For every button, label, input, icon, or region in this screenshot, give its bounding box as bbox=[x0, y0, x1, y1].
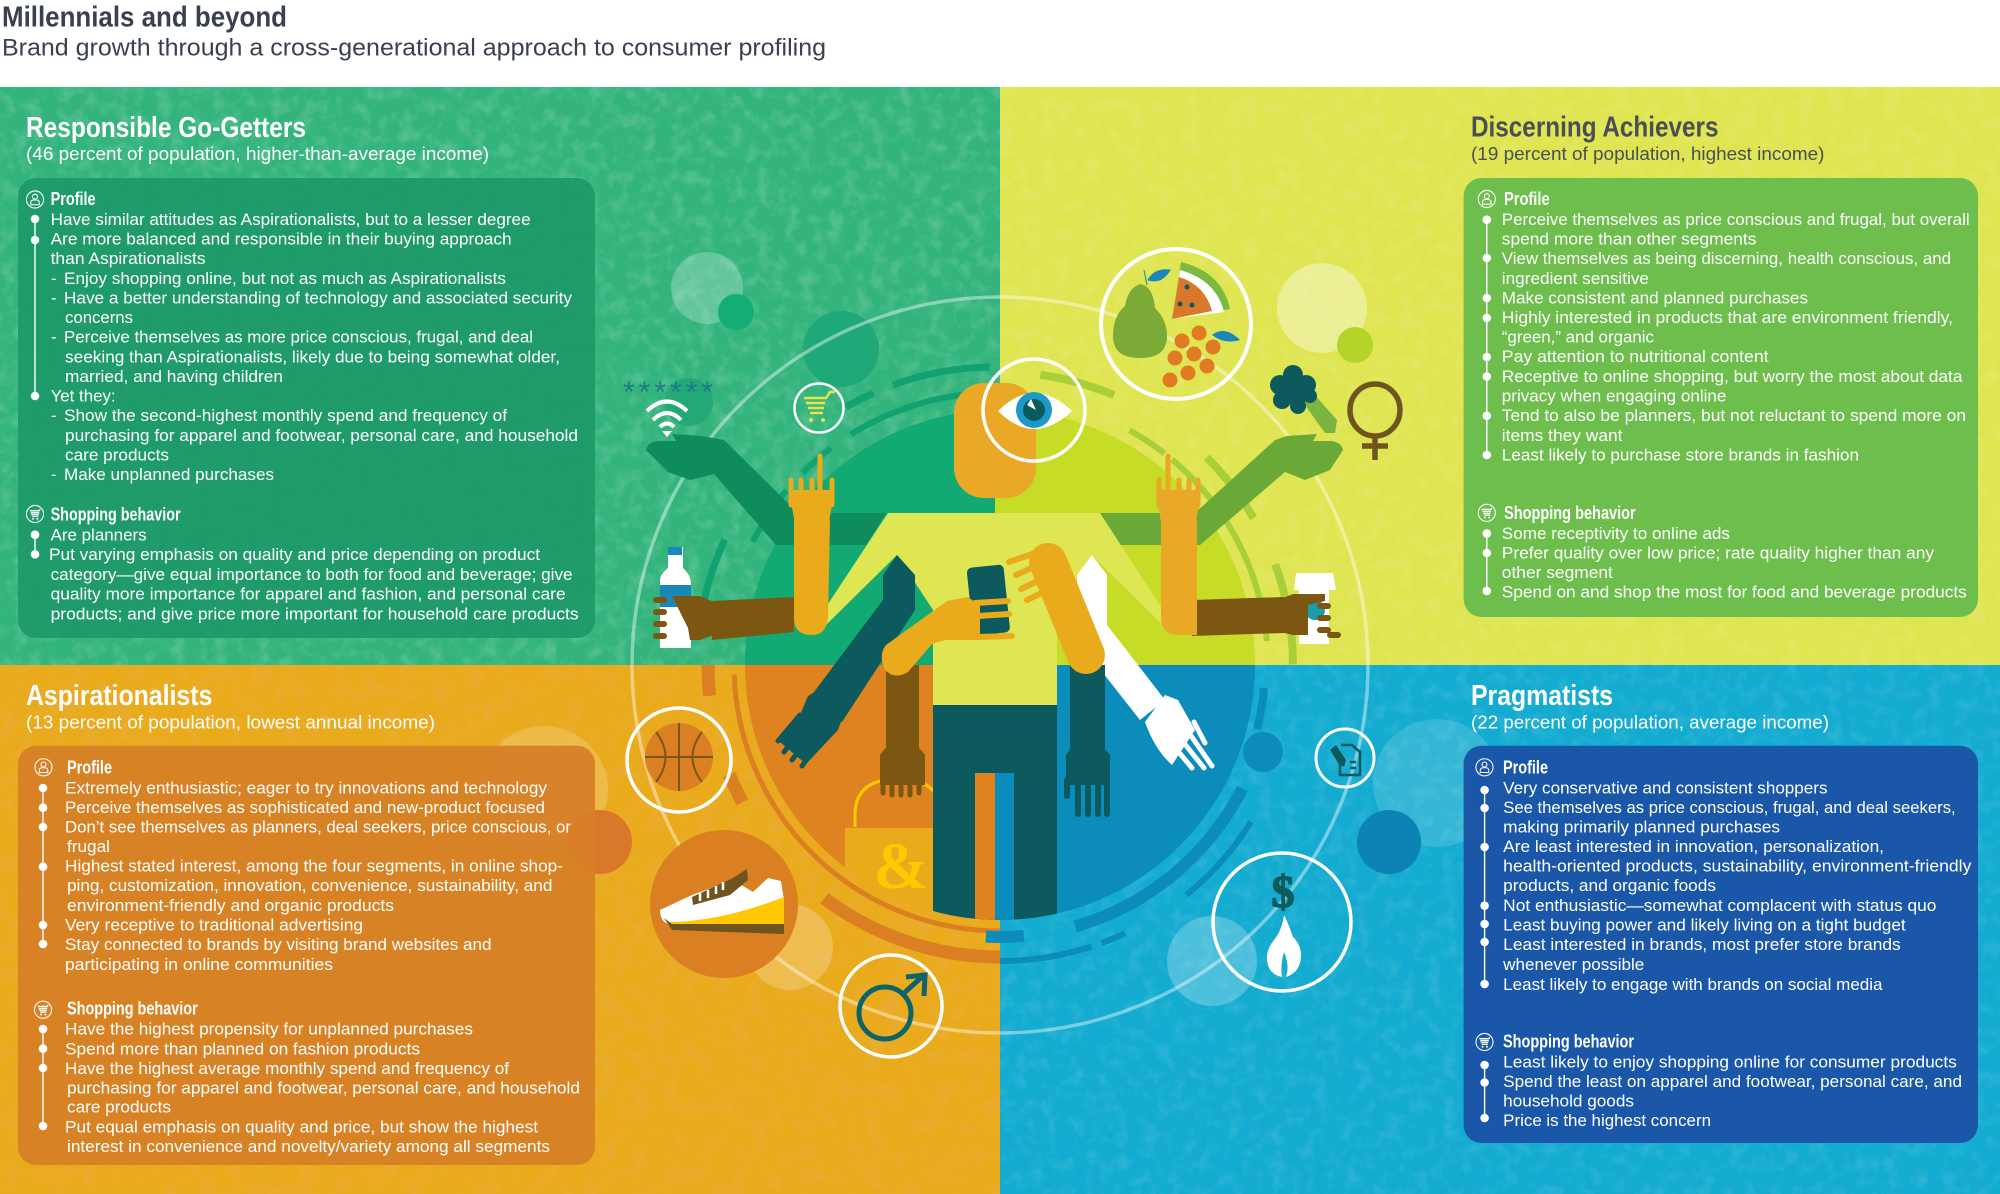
profile section bbox=[26, 188, 578, 484]
profile section: whenever possible bbox=[1502, 955, 1644, 974]
profile section: See themselves as price conscious, frugal, and deal seekers, bbox=[1503, 798, 1956, 817]
icon: dollar and flame bbox=[1213, 853, 1351, 991]
profile section: - bbox=[51, 288, 57, 308]
phone bbox=[966, 564, 1010, 636]
heading: Aspirationalists bbox=[26, 680, 212, 712]
illustration: central figure with icons bbox=[480, 249, 1501, 1057]
profile section: health-oriented products, sustainability, environment-friendly bbox=[1503, 857, 1972, 876]
shopping behavior section: interest in convenience and novelty/variety among all segments bbox=[67, 1137, 550, 1156]
profile section: Perceive themselves as price conscious and frugal, but overall bbox=[1502, 210, 1970, 229]
shopping behavior section: Some receptivity to online ads bbox=[1502, 524, 1730, 543]
icon: wifi and password bbox=[623, 376, 713, 437]
shopping behavior section: Prefer quality over low price; rate quality higher than any bbox=[1502, 543, 1935, 562]
heading: Responsible Go-Getters bbox=[26, 112, 306, 144]
profile section: Extremely enthusiastic; eager to try innovations and technology bbox=[65, 778, 548, 797]
profile section: Least interested in brands, most prefer store brands bbox=[1503, 935, 1901, 954]
icon: sneaker bbox=[650, 830, 798, 978]
shopping behavior section: Shopping behavior bbox=[1504, 502, 1636, 523]
shopping behavior section: Spend the least on apparel and footwear, personal care, and bbox=[1503, 1072, 1962, 1091]
decorative circles bbox=[480, 252, 1501, 1006]
profile section: Profile bbox=[67, 756, 112, 777]
shopping behavior section bbox=[34, 998, 580, 1156]
profile section: Not enthusiastic—somewhat complacent with status quo bbox=[1503, 896, 1936, 915]
profile section: View themselves as being discerning, health conscious, and bbox=[1502, 249, 1951, 268]
icon: wifi and password: ****** bbox=[623, 376, 713, 409]
profile section: Have a better understanding of technology and associated security bbox=[64, 288, 573, 308]
icon: fruit bbox=[1101, 249, 1251, 399]
shopping behavior section: Have the highest average monthly spend and frequency of bbox=[65, 1059, 509, 1078]
profile section: - bbox=[51, 465, 57, 484]
icon: male symbol bbox=[840, 955, 942, 1057]
profile section bbox=[1476, 756, 1972, 994]
inner disc bbox=[745, 410, 1255, 920]
profile section: Make consistent and planned purchases bbox=[1502, 288, 1808, 308]
teal lower arm with hand bbox=[1066, 665, 1110, 814]
heading bbox=[1471, 680, 1829, 733]
profile section: products, and organic foods bbox=[1503, 876, 1716, 895]
profile section: Profile bbox=[51, 188, 96, 209]
profile section: married, and having children bbox=[65, 367, 283, 386]
profile section: Tend to also be planners, but not reluctant to spend more on bbox=[1502, 406, 1966, 425]
profile section: environment-friendly and organic products bbox=[67, 896, 394, 915]
shopping behavior section: purchasing for apparel and footwear, personal care, and household bbox=[67, 1079, 580, 1098]
heading: (22 percent of population, average income) bbox=[1471, 712, 1829, 733]
icon: broccoli bbox=[1270, 365, 1337, 433]
heading: Pragmatists bbox=[1471, 680, 1613, 712]
profile section: Are least interested in innovation, personalization, bbox=[1503, 837, 1884, 856]
orange arm pointing at phone bbox=[1009, 552, 1086, 655]
heading bbox=[26, 112, 489, 164]
orange arm holding phone bbox=[882, 597, 1012, 676]
text box bbox=[18, 178, 595, 638]
shopping bag: & bbox=[874, 830, 928, 903]
profile section: Don’t see themselves as planners, deal seekers, price conscious, or bbox=[65, 818, 571, 837]
profile section: “green,” and organic bbox=[1502, 328, 1654, 346]
profile section: - bbox=[51, 406, 57, 425]
shopping behavior section: Shopping behavior bbox=[51, 504, 181, 525]
green arms bbox=[646, 434, 1343, 545]
shopping behavior section: care products bbox=[67, 1098, 171, 1116]
shopping bag bbox=[845, 780, 933, 911]
shopping behavior section bbox=[1478, 502, 1967, 602]
profile section: Have similar attitudes as Aspirationalists, but to a lesser degree bbox=[51, 210, 531, 229]
heading bbox=[26, 680, 435, 733]
profile section: ping, customization, innovation, convenience, sustainability, and bbox=[67, 876, 552, 895]
icon: shopping cart bbox=[794, 384, 844, 432]
profile section: Show the second-highest monthly spend and frequency of bbox=[64, 406, 507, 425]
profile section bbox=[1478, 188, 1970, 465]
shopping behavior section: quality more importance for apparel and fashion, and personal care bbox=[51, 585, 566, 604]
profile section: concerns bbox=[65, 308, 133, 327]
brown lower arm with hand bbox=[880, 665, 925, 795]
shopping behavior section: Have the highest propensity for unplanned purchases bbox=[65, 1020, 473, 1039]
torso and sleeves bbox=[826, 513, 1163, 707]
shopping behavior section: Shopping behavior bbox=[1503, 1031, 1634, 1052]
heading: (19 percent of population, highest income) bbox=[1471, 143, 1824, 164]
profile section: frugal bbox=[67, 837, 110, 856]
icon: basketball bbox=[627, 708, 731, 812]
brown arm and water bottle bbox=[656, 547, 794, 648]
heading bbox=[1471, 112, 1824, 164]
title bbox=[2, 2, 826, 62]
white arm right bbox=[1077, 555, 1212, 768]
shopping behavior section: Shopping behavior bbox=[67, 998, 198, 1018]
profile section: - bbox=[51, 328, 57, 346]
panel: Pragmatists bbox=[1464, 680, 1978, 1143]
profile section: Perceive themselves as more price conscious, frugal, and deal bbox=[64, 328, 533, 346]
orange upper right arm bbox=[1156, 456, 1201, 635]
profile section: making primarily planned purchases bbox=[1503, 818, 1780, 837]
shopping behavior section: Put varying emphasis on quality and price depending on product bbox=[49, 545, 540, 564]
profile section bbox=[35, 756, 571, 974]
profile section: privacy when engaging online bbox=[1502, 386, 1726, 406]
shopping behavior section: Least likely to enjoy shopping online for consumer products bbox=[1503, 1053, 1957, 1072]
profile section: care products bbox=[65, 446, 169, 465]
shopping behavior section: Spend more than planned on fashion products bbox=[65, 1039, 420, 1058]
title: Millennials and beyond bbox=[2, 2, 287, 34]
profile section: Least buying power and likely living on a tight budget bbox=[1503, 916, 1906, 935]
icon: document bbox=[1316, 729, 1374, 787]
panel: Aspirationalists bbox=[18, 680, 595, 1165]
profile section: Pay attention to nutritional content bbox=[1502, 347, 1769, 366]
shopping behavior section: Spend on and shop the most for food and beverage products bbox=[1502, 583, 1967, 602]
profile section: Very receptive to traditional advertising bbox=[65, 916, 363, 935]
panel: Responsible Go-Getters bbox=[18, 112, 595, 638]
brown arm and coffee cup bbox=[1192, 573, 1338, 644]
dashed rings bbox=[697, 367, 1296, 963]
profile section: Highly interested in products that are environment friendly, bbox=[1502, 308, 1953, 327]
profile section: participating in online communities bbox=[65, 955, 333, 974]
icon: eye bbox=[983, 359, 1085, 461]
profile section: - bbox=[51, 269, 57, 288]
shopping behavior section: products; and give price more important for household care products bbox=[51, 604, 579, 623]
shopping behavior section: household goods bbox=[1503, 1092, 1634, 1110]
profile section: purchasing for apparel and footwear, personal care, and household bbox=[65, 426, 578, 445]
profile section: Are more balanced and responsible in their buying approach bbox=[51, 230, 512, 249]
pants bbox=[933, 705, 1057, 920]
shopping behavior section: Are planners bbox=[51, 526, 147, 545]
title: Brand growth through a cross-generational approach to consumer profiling bbox=[2, 34, 826, 62]
icon: female symbol bbox=[1350, 384, 1400, 460]
heading: (46 percent of population, higher-than-average income) bbox=[26, 143, 489, 164]
profile section: Yet they: bbox=[51, 386, 116, 406]
heading: (13 percent of population, lowest annual income) bbox=[26, 712, 435, 733]
teal arm left bbox=[778, 555, 915, 766]
heading: Discerning Achievers bbox=[1471, 112, 1718, 144]
profile section: Very conservative and consistent shoppers bbox=[1503, 778, 1828, 797]
text box bbox=[18, 746, 595, 1165]
profile section: ingredient sensitive bbox=[1502, 269, 1649, 288]
profile section: Enjoy shopping online, but not as much as Aspirationalists bbox=[64, 269, 506, 288]
profile section: items they want bbox=[1502, 426, 1623, 445]
shopping behavior section: other segment bbox=[1502, 563, 1613, 582]
profile section: Least likely to engage with brands on social media bbox=[1503, 975, 1883, 994]
profile section: Perceive themselves as sophisticated and new-product focused bbox=[65, 798, 545, 817]
profile section: Profile bbox=[1503, 756, 1548, 777]
shopping behavior section bbox=[1476, 1031, 1962, 1130]
outer ring bbox=[632, 297, 1368, 1033]
text box bbox=[1464, 178, 1978, 617]
text box bbox=[1464, 746, 1978, 1143]
shopping behavior section bbox=[26, 504, 579, 623]
profile section: spend more than other segments bbox=[1502, 230, 1756, 249]
shopping behavior section: category—give equal importance to both for food and beverage; give bbox=[51, 565, 573, 584]
orange upper left arm bbox=[789, 456, 834, 635]
profile section: Highest stated interest, among the four segments, in online shop- bbox=[65, 857, 563, 876]
head bbox=[954, 383, 1036, 498]
icon: dollar and flame: $ bbox=[1272, 866, 1294, 917]
profile section: Profile bbox=[1504, 188, 1550, 209]
profile section: Least likely to purchase store brands in fashion bbox=[1502, 446, 1859, 464]
profile section: Receptive to online shopping, but worry the most about data bbox=[1502, 367, 1963, 386]
shopping behavior section: Price is the highest concern bbox=[1503, 1111, 1711, 1130]
profile section: Make unplanned purchases bbox=[64, 465, 274, 484]
profile section: seeking than Aspirationalists, likely due to being somewhat older, bbox=[65, 348, 560, 366]
profile section: Stay connected to brands by visiting brand websites and bbox=[65, 935, 492, 954]
shopping behavior section: Put equal emphasis on quality and price, but show the highest bbox=[65, 1118, 538, 1137]
profile section: than Aspirationalists bbox=[51, 249, 206, 268]
panel: Discerning Achievers bbox=[1464, 112, 1978, 617]
